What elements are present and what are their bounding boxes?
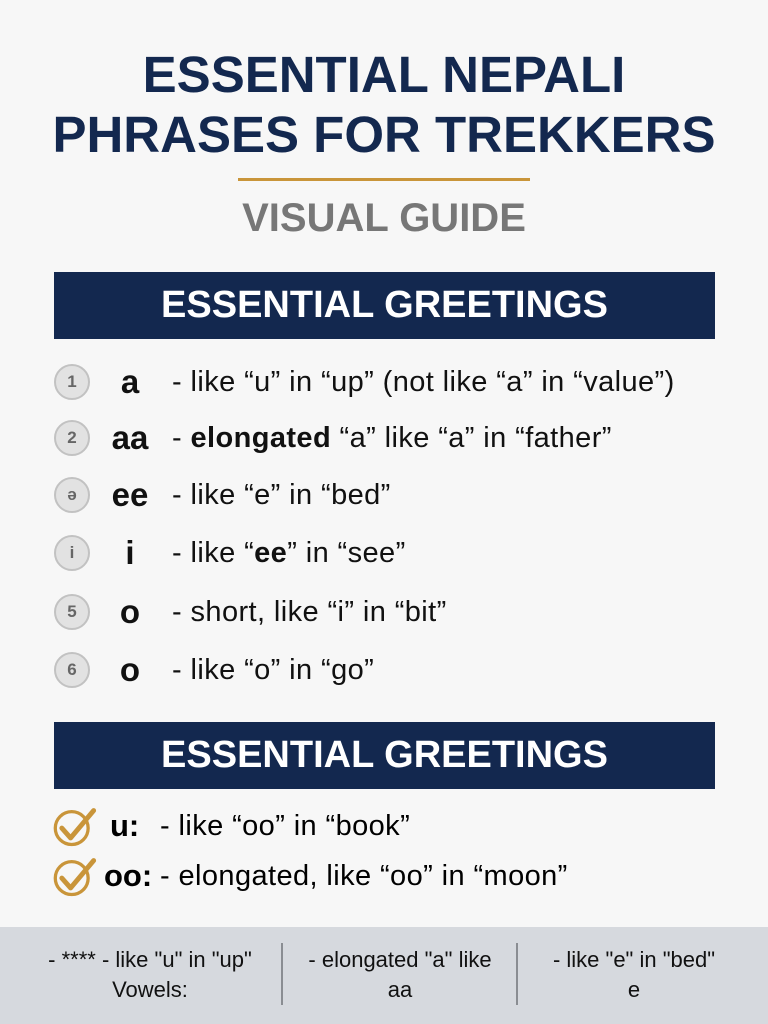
row 2: aa [112, 419, 148, 456]
row 6: 6 [67, 660, 77, 679]
footer col 2: aa [388, 977, 412, 1002]
check row u: u: [110, 808, 139, 843]
row 3: ə [67, 485, 77, 504]
row 2: - elongated “a” like “a” in “father” [172, 422, 612, 454]
footer col 1: Vowels: [112, 977, 188, 1002]
row 4: - like “ee” in “see” [172, 537, 406, 569]
row 1: 1 [67, 372, 77, 391]
row 5 [54, 593, 447, 630]
footer col 3: e [628, 977, 640, 1002]
check row u: - like “oo” in “book” [160, 810, 410, 842]
banner: essential greetings 1 [54, 272, 715, 339]
banner: essential greetings 2 [54, 722, 715, 789]
row 1: a [121, 363, 139, 400]
footer col 3: - like "e" in "bed" [553, 947, 715, 972]
footer col 2: - elongated "a" like [308, 947, 492, 972]
banner: essential greetings 1: ESSENTIAL GREETINGS [161, 284, 608, 326]
icon: check [54, 808, 96, 846]
row 5: o [120, 593, 140, 630]
banner: essential greetings 2: ESSENTIAL GREETINGS [161, 734, 608, 776]
row 5: 5 [67, 602, 77, 621]
footer col 1: - **** - like "u" in "up" [48, 947, 252, 972]
row 3: - like “e” in “bed” [172, 479, 391, 511]
row 3: ee [112, 476, 148, 513]
footer col 1 [48, 947, 252, 1002]
check row oo: oo: [104, 858, 152, 893]
row 3 [54, 476, 391, 513]
row 6: - like “o” in “go” [172, 654, 374, 686]
row 6 [54, 651, 374, 688]
row 6: o [120, 651, 140, 688]
check row oo: - elongated, like “oo” in “moon” [160, 860, 568, 892]
title: PHRASES FOR TREKKERS [52, 106, 716, 163]
check row u [54, 808, 410, 846]
subtitle: VISUAL GUIDE [242, 196, 526, 240]
row 1: - like “u” in “up” (not like “a” in “value”) [172, 366, 675, 398]
vowel list [54, 363, 675, 688]
footer panel [0, 927, 768, 1024]
row 4: i [70, 543, 74, 562]
divider gold [238, 178, 530, 181]
icon: check [54, 858, 96, 896]
row 5: - short, like “i” in “bit” [172, 596, 447, 628]
title [52, 46, 716, 163]
check list [54, 808, 568, 896]
row 4 [54, 534, 406, 571]
title: ESSENTIAL NEPALI [143, 46, 625, 103]
footer col 2 [308, 947, 492, 1002]
footer col 3 [553, 947, 715, 1002]
check row oo [54, 858, 568, 896]
row 2: 2 [67, 428, 77, 447]
row 4: i [125, 534, 135, 571]
row 2 [54, 419, 612, 456]
